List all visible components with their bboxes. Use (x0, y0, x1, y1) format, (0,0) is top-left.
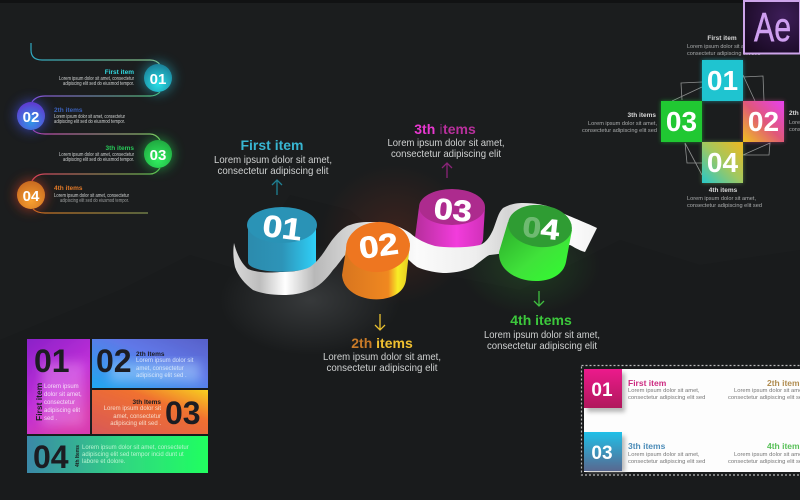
block 04 (27, 436, 208, 475)
text: first item (59, 69, 134, 87)
cylinder 03: 03 (433, 192, 473, 228)
text: 4th item: 4th items (54, 185, 83, 192)
block 02: 02 (96, 343, 132, 379)
block 02: Lorem ipsum dolor sit (136, 358, 194, 364)
text: 4th item: Lorem ipsum dolor sit amet, consectetur (54, 193, 129, 199)
text: first item (687, 35, 760, 57)
text: first item: adipiscing elit sed do eiusmod tempor. (63, 81, 134, 87)
arrow up (442, 163, 452, 178)
square 01: 01 (707, 65, 738, 96)
square 03 (661, 101, 702, 142)
text: 4th item: adipiscing elit sed do eiusmod tempor. (60, 198, 129, 204)
card 03: 03 (591, 443, 613, 464)
text: 3th item: adipiscing elit sed do eiusmod tempor. (63, 157, 134, 163)
text: first item: Lorem ipsum dolor sit amet, (687, 44, 755, 50)
callout: 4th items: 4th items (510, 312, 572, 328)
square 01 (702, 60, 743, 101)
text: first item: consectetur adipiscing elit sed (687, 51, 760, 57)
icon: After Effects logo (744, 1, 800, 54)
callout: 4th items: consectetur adipiscing elit (487, 340, 597, 352)
card 01: 01 (591, 380, 613, 401)
text: 4th items (687, 187, 762, 209)
callout: 4th items (484, 291, 600, 352)
callout: 3th items: Lorem ipsum dolor sit amet, (388, 137, 504, 149)
text: 4th item (54, 185, 129, 204)
text: 4th items: consectetur adipiscing elit sed (687, 203, 762, 209)
text: 3th items: Lorem ipsum dolor sit amet, (588, 121, 657, 127)
card 03: Lorem ipsum dolor sit amet, (628, 452, 700, 458)
cylinder 04: 04 (521, 210, 561, 246)
text: 2th items (789, 110, 800, 133)
callout: 3th items: 3th items (414, 121, 476, 137)
square 04: 04 (707, 147, 738, 178)
callout: 2th items: consectetur adipiscing elit (326, 362, 438, 374)
block 01: First item (34, 382, 44, 421)
ribbon (233, 203, 597, 295)
node 04: 04 (23, 188, 40, 205)
square 02: 02 (748, 106, 779, 137)
callout: first item: consectetur adipiscing elit (218, 165, 329, 177)
callout: 3th items (388, 121, 504, 178)
text: first item: First item (707, 35, 737, 42)
callout: 2th items (323, 314, 441, 374)
block 02 (92, 339, 208, 388)
chart: 3D ribbon with cylinders (233, 189, 597, 299)
card 02 (728, 378, 800, 401)
card 01: First item (628, 378, 667, 388)
card 01: consectetur adipiscing elit sed (628, 395, 705, 401)
text: 4th items: Lorem ipsum dolor sit amet, (687, 196, 756, 202)
block 04: Lorem ipsum dolor sit amet, consectetur (82, 445, 189, 451)
text: 3th items (582, 112, 657, 134)
node 02: 02 (23, 109, 39, 126)
cylinder 02 (342, 219, 412, 299)
node 01: 01 (150, 71, 166, 88)
block 03: 03 (165, 395, 201, 431)
text: 2th item: adipiscing elit sed do eiusmod tempor. (54, 119, 125, 125)
node 02 (16, 101, 46, 131)
text: 2th item: Lorem ipsum dolor sit amet, consectetur (54, 114, 125, 120)
block 01: dolor sit amet, (44, 392, 82, 398)
cylinder 02: 02 (357, 226, 400, 265)
callout: 2th items: 2th items (351, 335, 413, 351)
callout: 3th items: consectetur adipiscing elit (391, 148, 501, 160)
block 04: labore et dolore. (82, 459, 126, 465)
block 02: 2th Items (136, 351, 165, 358)
cylinder 04 (499, 202, 574, 281)
block 04: 04 (33, 439, 69, 475)
panel: cube cross (582, 35, 800, 209)
connector lines (31, 43, 160, 213)
block 01: adipiscing elit (44, 408, 80, 414)
block 03: amet, consectetur (113, 414, 161, 420)
arrow up (272, 180, 282, 195)
panel: colour blocks (27, 339, 208, 475)
block 01: Lorem ipsum (44, 384, 79, 390)
block 02: adipiscing elit sed . (136, 373, 187, 379)
text: 3th items: consectetur adipiscing elit sed (582, 128, 657, 134)
callout: first item (214, 137, 332, 195)
rotated outlines (672, 75, 770, 175)
text: 3th item: 3th items (105, 145, 134, 152)
callout: 4th items: Lorem ipsum dolor sit amet, (484, 329, 600, 341)
card 03: 3th items (628, 441, 666, 451)
block 01: consectetur (44, 400, 75, 406)
node 04 (16, 180, 46, 210)
card 01: Lorem ipsum dolor sit amet, (628, 388, 700, 394)
block 04: 4th Items (75, 445, 81, 467)
text: 3th item (59, 145, 134, 163)
card 04 (728, 441, 800, 465)
text: 4th items: 4th items (709, 187, 738, 194)
callout: 2th items: Lorem ipsum dolor sit amet, (323, 351, 441, 363)
block 02: amet, consectetur (136, 366, 184, 372)
arrow down (375, 314, 385, 330)
text: first item: Lorem ipsum dolor sit amet, consectetur (59, 76, 134, 82)
panel: neon timeline (16, 43, 173, 213)
text: 3th items: 3th items (627, 112, 656, 119)
card 01 (584, 369, 705, 412)
square 03: 03 (666, 106, 697, 137)
callout: first item: Lorem ipsum dolor sit amet, (214, 154, 332, 166)
block 04: adipiscing elit sed tempor incid dunt ut (82, 452, 184, 458)
block 03: Lorem ipsum dolor sit (104, 406, 161, 412)
panel: white cards (582, 366, 800, 475)
cylinder 01: 01 (261, 208, 304, 247)
node 03: 03 (150, 147, 166, 164)
block 03: 3th Items (132, 399, 161, 406)
cylinder 03 (414, 189, 485, 257)
node 01 (143, 63, 173, 93)
block 03 (92, 390, 208, 434)
text: 2th item: 2th items (54, 107, 83, 114)
block 01 (27, 339, 90, 434)
card 03: consectetur adipiscing elit sed (628, 459, 705, 465)
arrow down (534, 291, 544, 306)
block 01: 01 (34, 343, 70, 379)
square 04 (702, 142, 743, 183)
cylinder 01 (247, 207, 317, 272)
card 03 (584, 432, 705, 472)
callout: first item: First item (240, 137, 304, 153)
text: 2th item (54, 107, 125, 125)
text: first item: First item (105, 69, 134, 76)
block 03: adipiscing elit sed . (110, 421, 161, 427)
text: 3th item: Lorem ipsum dolor sit amet, consectetur (59, 152, 134, 158)
node 03 (143, 139, 173, 169)
square 02 (743, 101, 784, 142)
block 01: sed . (44, 416, 57, 422)
icon: After Effects logo: Ae (754, 3, 791, 50)
